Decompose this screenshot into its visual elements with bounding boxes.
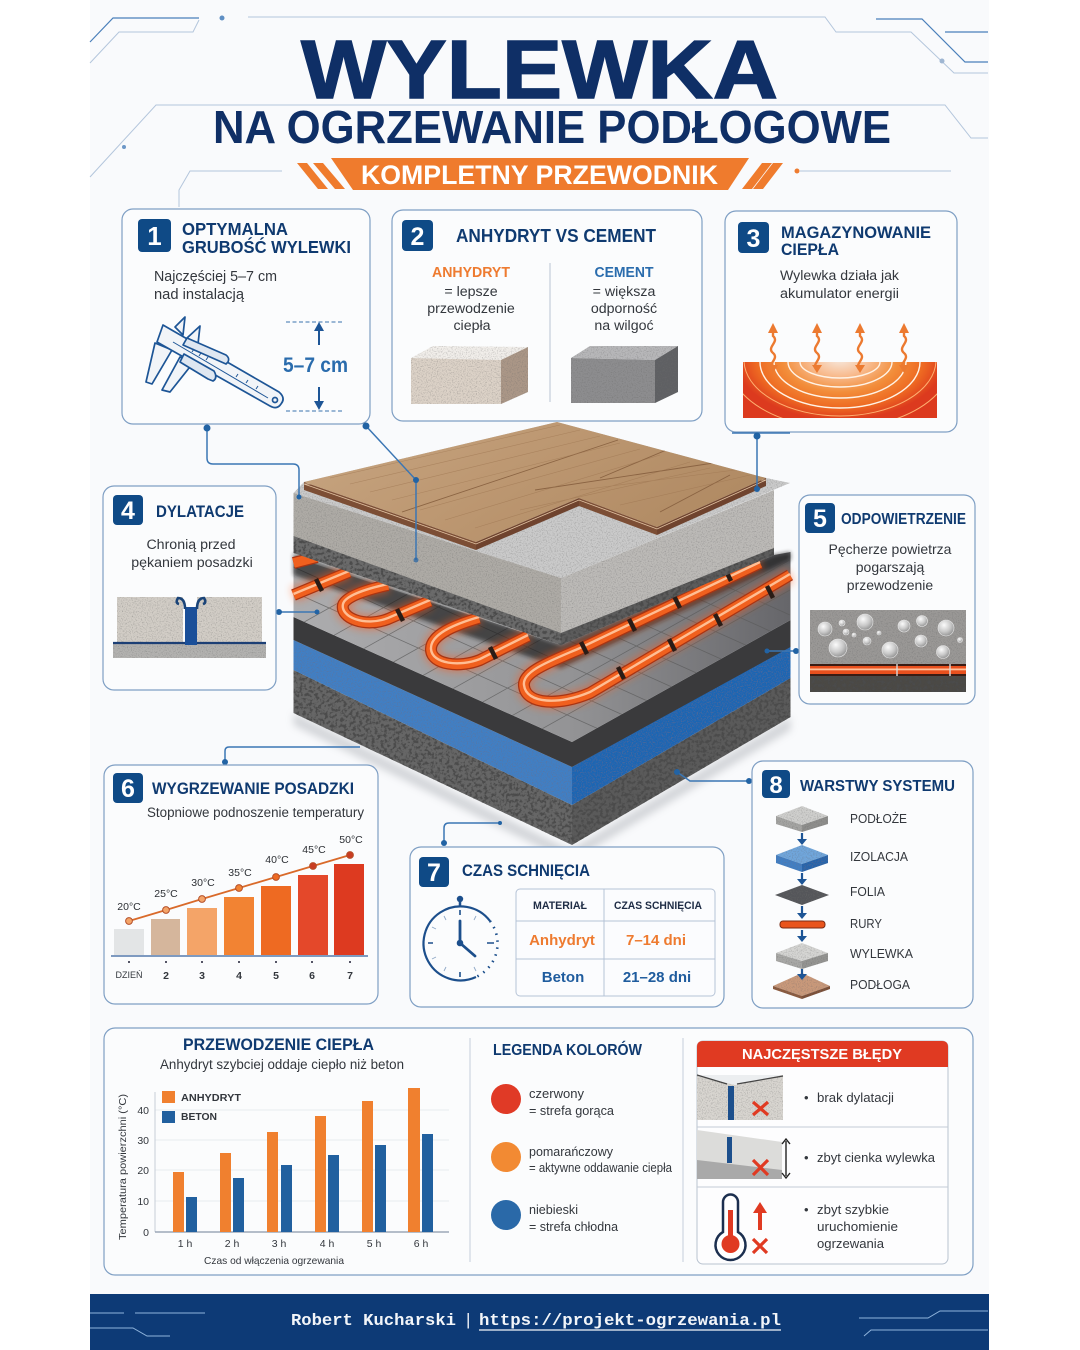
panel 5: odpowietrzenie <box>799 495 975 704</box>
bar chart: temperature per day: 45°C <box>302 844 326 856</box>
badge 1 <box>138 219 171 252</box>
heading 2: ANHYDRYT VS CEMENT <box>456 226 656 246</box>
icon: clock <box>424 896 498 980</box>
badge 1: 1 <box>147 221 162 251</box>
panel 7: czas schnięcia <box>410 847 724 1007</box>
body text 5: przewodzenie <box>847 577 933 593</box>
column: anhydryt: ANHYDRYT <box>432 265 510 281</box>
error 3: starting heating too fast: ogrzewania <box>817 1236 885 1251</box>
heading: przewodzenie ciepła: PRZEWODZENIE CIEPŁA <box>183 1036 374 1054</box>
chart legend <box>162 1091 242 1123</box>
decorative circuit lines <box>90 16 988 207</box>
body text 6: Stopniowe podnoszenie temperatury <box>147 805 364 820</box>
heading: legenda kolorów: LEGENDA KOLORÓW <box>493 1041 642 1059</box>
bar chart: temperature per day: 6 <box>309 970 315 982</box>
heading 8: WARSTWY SYSTEMU <box>800 778 955 795</box>
layer stack labels <box>850 812 914 992</box>
bottom panel <box>104 1028 973 1275</box>
column: cement: na wilgoć <box>594 318 654 334</box>
heat arrows <box>768 323 909 373</box>
column: cement: = większa <box>593 284 655 300</box>
table: drying times: MATERIAŁ <box>533 900 587 912</box>
panel 1: optymalna grubość wylewki <box>122 209 370 424</box>
section: przewodzenie ciepła <box>117 1036 449 1267</box>
column: anhydryt: ciepła <box>453 318 491 334</box>
error 3: starting heating too fast <box>716 1195 898 1260</box>
dimension: 5–7 cm with arrows: 5–7 cm <box>283 353 348 377</box>
table: drying times: Beton <box>542 969 584 986</box>
subheading: Anhydryt szybciej oddaje ciepło niż beton <box>160 1057 404 1072</box>
layer stack labels: RURY <box>850 917 883 931</box>
bar chart: anhydryt vs beton: 10 <box>137 1196 149 1208</box>
footer author and link: Robert Kucharski <box>291 1312 456 1331</box>
error 3: starting heating too fast: zbyt szybkie <box>817 1202 889 1217</box>
connector lines <box>204 422 799 846</box>
legend: red zone: = strefa gorąca <box>529 1104 614 1118</box>
bar chart: temperature per day: 7 <box>347 970 353 982</box>
panel 6: wygrzewanie posadzki <box>104 765 378 1004</box>
bar chart: temperature per day: DZIEŃ <box>116 970 142 980</box>
panel 4: dylatacje <box>103 486 276 690</box>
column: cement <box>591 265 657 334</box>
bar chart: temperature per day: 5 <box>273 970 279 982</box>
legend: orange zone: pomarańczowy <box>529 1145 614 1159</box>
bar chart: temperature per day: 35°C <box>228 867 252 879</box>
layer: base concrete <box>294 670 790 845</box>
table: drying times <box>516 889 715 996</box>
badge 2: 2 <box>411 223 424 251</box>
panel 2: anhydryt vs cement <box>392 210 702 421</box>
badge 4: 4 <box>121 497 135 525</box>
badge 3: 3 <box>747 225 760 253</box>
panel 8: warstwy systemu <box>752 761 973 1008</box>
badge 8 <box>762 770 790 799</box>
layer: gravel band under screed <box>294 535 774 645</box>
bar chart: anhydryt vs beton: 6 h <box>414 1238 428 1250</box>
error 2: too thin screed: • <box>804 1150 809 1165</box>
bar chart: temperature per day: 2 <box>163 970 169 982</box>
body text 4: Chronią przed <box>146 537 236 553</box>
heading 3: MAGAZYNOWANIE <box>781 223 931 242</box>
banner: kompletny przewodnik <box>297 158 783 190</box>
bar chart: temperature per day: 3 <box>199 970 205 982</box>
heading 4: DYLATACJE <box>156 503 244 521</box>
bar chart: temperature per day: 20°C <box>117 901 141 913</box>
footer author and link: https://projekt-ogrzewania.pl <box>479 1312 781 1331</box>
bar chart: anhydryt vs beton: 0 <box>143 1227 149 1239</box>
table: drying times: 7–14 dni <box>626 932 686 949</box>
badge 8: 8 <box>769 772 783 799</box>
bar chart: temperature per day: 40°C <box>265 854 289 866</box>
badge 5: 5 <box>813 505 827 533</box>
error 1: no expansion joint <box>697 1075 894 1120</box>
badge 7: 7 <box>427 859 441 887</box>
bar chart: anhydryt vs beton: 40 <box>137 1105 149 1117</box>
subtitle: NA OGRZEWANIE PODŁOGOWE <box>213 101 891 153</box>
error header <box>697 1041 948 1067</box>
central floor cross-section illustration <box>287 422 798 846</box>
table: drying times: 21–28 dni <box>623 969 691 986</box>
section: legenda kolorów <box>491 1041 672 1234</box>
panel 3: magazynowanie ciepła <box>725 211 957 432</box>
badge 2 <box>402 220 433 251</box>
heading 1: OPTYMALNA <box>182 219 288 239</box>
layer: screed <box>294 422 790 633</box>
body text 5: pogarszają <box>856 559 924 575</box>
layer stack icons <box>773 806 830 999</box>
layer stack labels: PODŁOGA <box>850 978 911 992</box>
legend: orange zone <box>491 1142 672 1175</box>
bar chart: anhydryt vs beton <box>117 1088 449 1267</box>
bar chart: anhydryt vs beton: 30 <box>137 1135 149 1147</box>
column: anhydryt: przewodzenie <box>427 301 515 317</box>
footer author and link <box>291 1310 781 1331</box>
heading 3: CIEPŁA <box>781 240 839 259</box>
bar chart: temperature per day: 4 <box>236 970 242 982</box>
icon: caliper <box>146 317 283 408</box>
legend: blue zone: = strefa chłodna <box>529 1220 618 1234</box>
body text 1: Najczęściej 5–7 cm <box>154 269 277 285</box>
illustration: expansion joint <box>113 597 266 658</box>
heading 6: WYGRZEWANIE POSADZKI <box>152 780 354 798</box>
layer stack labels: PODŁOŻE <box>850 812 907 826</box>
error 3: starting heating too fast: uruchomienie <box>817 1219 898 1234</box>
title: WYLEWKA: WYLEWKA <box>301 23 778 116</box>
error 1: no expansion joint: brak dylatacji <box>817 1090 894 1105</box>
heading 1: GRUBOŚĆ WYLEWKI <box>182 236 351 257</box>
layer stack labels: IZOLACJA <box>850 850 909 864</box>
legend: orange zone: = aktywne oddawanie ciepła <box>529 1161 672 1175</box>
layer stack labels: WYLEWKA <box>850 947 914 961</box>
layer: black foil <box>294 617 790 767</box>
legend: red zone <box>491 1084 614 1118</box>
pipe clips <box>316 569 773 679</box>
block: cement <box>571 346 678 403</box>
bar chart: anhydryt vs beton: 4 h <box>320 1238 334 1250</box>
heat gradient illustration <box>743 362 937 418</box>
bar chart: anhydryt vs beton: Czas od włączenia ogrzewania <box>204 1255 344 1267</box>
bar chart: temperature per day: 50°C <box>339 834 363 846</box>
legend: blue zone: niebieski <box>529 1203 578 1217</box>
title <box>213 23 891 190</box>
error 1: no expansion joint: • <box>804 1090 809 1105</box>
badge 3 <box>738 222 769 253</box>
table: drying times: CZAS SCHNIĘCIA <box>614 900 702 912</box>
layer: wood flooring <box>304 422 766 550</box>
column: anhydryt: = lepsze <box>444 284 498 300</box>
layer: blue insulation <box>294 640 790 805</box>
layer: foil with grid <box>290 549 794 742</box>
badge 4 <box>113 495 143 525</box>
footer author and link: | <box>466 1310 470 1329</box>
dimension: 5–7 cm with arrows <box>283 322 348 411</box>
body text 3: akumulator energii <box>780 286 899 302</box>
bar chart: anhydryt vs beton: Temperatura powierzchni (°C) <box>117 1094 129 1240</box>
badge 6: 6 <box>121 775 135 803</box>
panel: najczęstsze błędy <box>697 1041 948 1264</box>
error 2: too thin screed <box>697 1130 936 1179</box>
error 3: starting heating too fast: • <box>804 1202 809 1217</box>
block: anhydryt <box>411 346 528 404</box>
table: drying times: Anhydryt <box>529 932 595 949</box>
legend: red zone: czerwony <box>529 1087 585 1101</box>
bar chart: temperature per day: 30°C <box>191 877 215 889</box>
layer stack labels: FOLIA <box>850 885 886 899</box>
bar chart: anhydryt vs beton: 1 h <box>178 1238 192 1250</box>
heating pipes <box>294 557 790 702</box>
bar chart: temperature per day: 25°C <box>154 888 178 900</box>
badge 7 <box>419 857 449 887</box>
heading 7: CZAS SCHNIĘCIA <box>462 862 590 880</box>
error header: NAJCZĘSTSZE BŁĘDY <box>742 1046 902 1063</box>
column: anhydryt <box>427 265 515 334</box>
body text 1: nad instalacją <box>154 287 245 303</box>
bar chart: anhydryt vs beton: 5 h <box>367 1238 381 1250</box>
bar chart: anhydryt vs beton: 20 <box>137 1165 149 1177</box>
banner: kompletny przewodnik: KOMPLETNY PRZEWODNIK <box>361 160 718 190</box>
error 2: too thin screed: zbyt cienka wylewka <box>817 1150 936 1165</box>
body text 4: pękaniem posadzki <box>131 555 253 571</box>
footer <box>90 1294 989 1350</box>
badge 6 <box>113 773 143 803</box>
illustration: air bubbles over pipe <box>810 610 966 692</box>
chart legend: BETON <box>181 1111 217 1123</box>
column: cement: odporność <box>591 301 657 317</box>
bar chart: anhydryt vs beton: 3 h <box>272 1238 286 1250</box>
column: cement: CEMENT <box>594 265 654 281</box>
bar chart: temperature per day <box>111 834 368 982</box>
body text 3: Wylewka działa jak <box>780 268 900 284</box>
legend: blue zone <box>491 1200 618 1234</box>
bar chart: anhydryt vs beton: 2 h <box>225 1238 239 1250</box>
body text 5: Pęcherze powietrza <box>829 541 952 557</box>
badge 5 <box>805 503 835 533</box>
chart legend: ANHYDRYT <box>181 1092 242 1104</box>
heading 5: ODPOWIETRZENIE <box>841 511 966 528</box>
